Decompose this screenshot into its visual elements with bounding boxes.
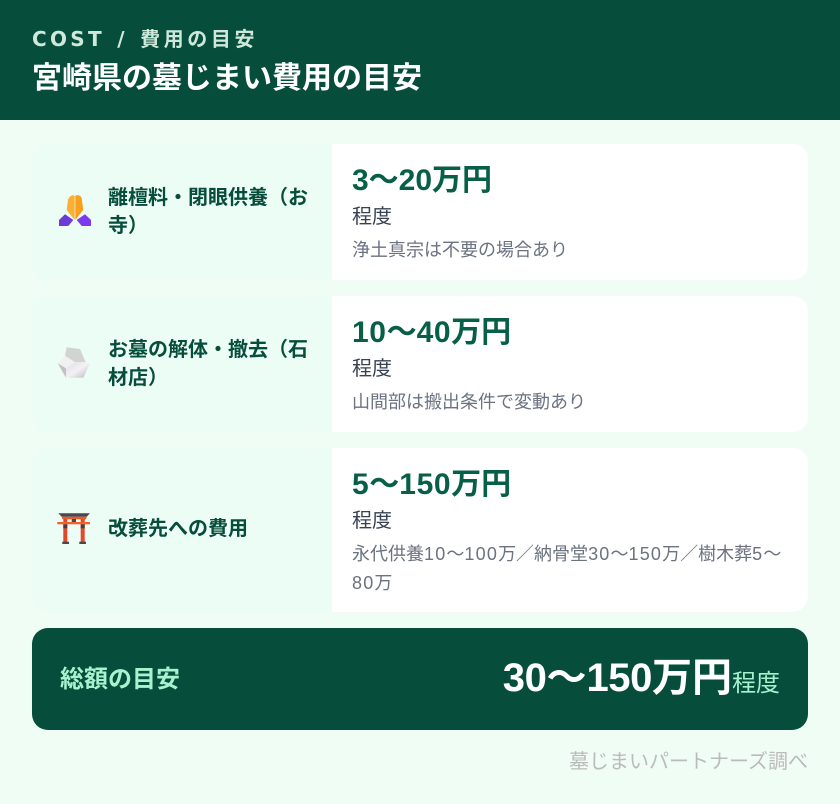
unit: 程度 [352,510,392,532]
note: 山間部は搬出条件で変動あり [352,392,586,412]
label text: お墓の解体・撤去（石材店） [108,339,308,389]
panel: temple fee [32,144,808,280]
total panel [32,628,808,730]
label cell [32,296,332,432]
header band [0,0,840,120]
total label: 総額の目安 [60,666,180,693]
panel: reburial [32,448,808,612]
unit: 程度 [352,206,392,228]
icon: torii gate [57,513,90,544]
icon: rock [58,347,90,378]
amount: 3〜20万円 [352,164,492,197]
note: 永代供養10〜100万／納骨堂30〜150万／樹木葬5〜 80万 [352,544,781,593]
note: 浄土真宗は不要の場合あり [352,240,568,260]
total amount: 30〜150万円程度 [503,656,780,700]
amount: 10〜40万円 [352,316,511,349]
title: 宮崎県の墓じまい費用の目安 [32,62,422,95]
source note: 墓じまいパートナーズ調べ [569,751,808,773]
label cell [32,144,332,280]
panel: dismantling [32,296,808,432]
eyebrow: COST / 費用の目安 [32,27,258,51]
unit: 程度 [352,358,392,380]
label text: 改葬先への費用 [108,518,248,540]
amount: 5〜150万円 [352,468,511,501]
icon: praying hands [59,195,91,226]
label cell [32,448,332,612]
label text: 離檀料・閉眼供養（お寺） [108,187,308,237]
